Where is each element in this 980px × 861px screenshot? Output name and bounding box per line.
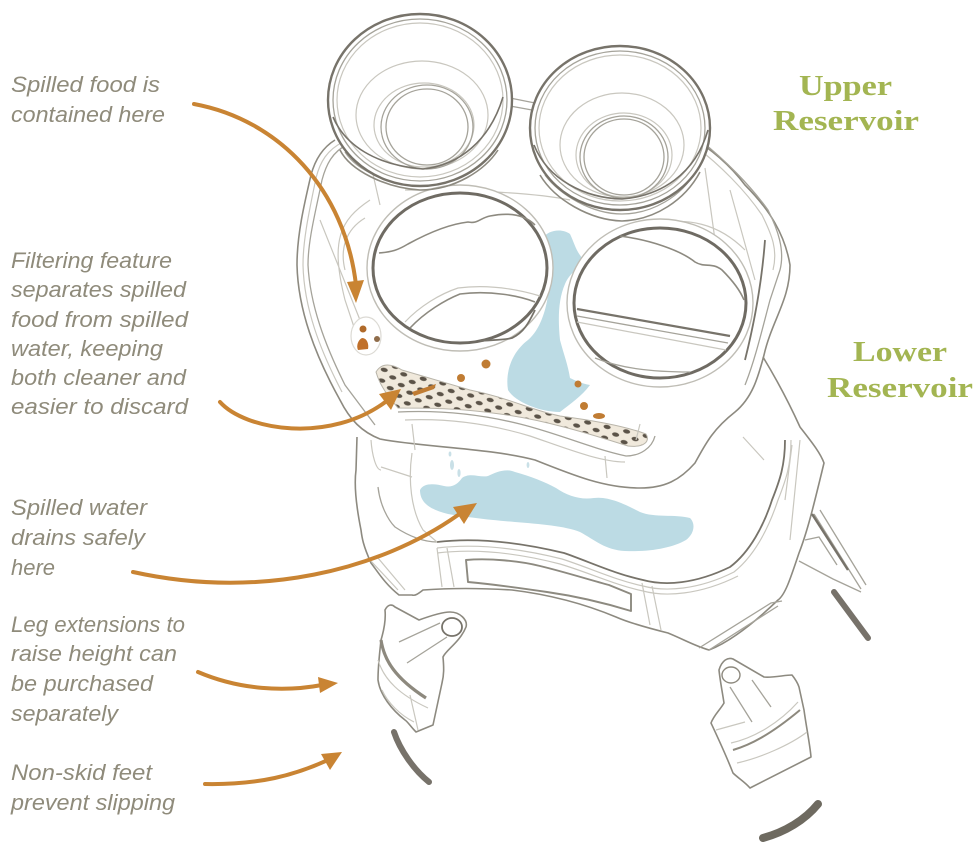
spilled food crumbs (412, 360, 605, 419)
text: leg extensions: separately (11, 701, 120, 726)
right leg extension (711, 658, 811, 788)
heading: upper reservoir (773, 70, 919, 137)
arrow: spilled food (194, 104, 364, 303)
text: filtering feature: Filtering feature (11, 248, 172, 273)
upper reservoir tray (297, 98, 790, 488)
heading: upper reservoir: Reservoir (773, 105, 919, 137)
bowl bridge (510, 98, 535, 110)
text: spilled water: here (11, 555, 55, 580)
text: leg extensions: be purchased (11, 671, 154, 696)
bowl left (328, 14, 512, 190)
text: filtering feature: separates spilled (11, 277, 187, 302)
heading: lower reservoir: Lower (853, 336, 947, 368)
text: spilled food: contained here (11, 102, 165, 127)
text: filtering feature: water, keeping (11, 336, 164, 361)
left ring opening (367, 185, 553, 351)
text: leg extensions (11, 612, 185, 726)
lower reservoir tray (355, 357, 824, 650)
bowl right (530, 46, 710, 221)
text: spilled water: drains safely (11, 525, 147, 550)
right foot pad (763, 804, 818, 838)
left leg extension (378, 605, 466, 732)
left foot pad (394, 732, 429, 782)
text: leg extensions: raise height can (11, 641, 177, 666)
water in upper reservoir (507, 231, 590, 412)
heading: upper reservoir: Upper (799, 70, 892, 102)
right ring opening (567, 219, 753, 387)
text: filtering feature: easier to discard (11, 394, 189, 419)
text: filtering feature: food from spilled (11, 307, 189, 332)
text: spilled food (11, 72, 165, 127)
text: leg extensions: Leg extensions to (11, 612, 185, 637)
food crumb pocket (351, 317, 381, 355)
arrow: filtering feature (220, 389, 401, 429)
text: non-skid feet: prevent slipping (10, 790, 176, 815)
arrow: spilled water (133, 503, 477, 583)
text: spilled water: Spilled water (11, 495, 149, 520)
text: filtering feature (11, 248, 189, 419)
text: spilled food: Spilled food is (11, 72, 160, 97)
text: filtering feature: both cleaner and (11, 365, 187, 390)
text: non-skid feet: Non-skid feet (11, 760, 153, 785)
text: non-skid feet (10, 760, 176, 815)
rear right leg (799, 510, 868, 638)
lower reservoir water (420, 470, 693, 551)
heading: lower reservoir (827, 336, 973, 404)
water drips (449, 452, 529, 477)
lower tray window (466, 559, 631, 611)
text: spilled water (11, 495, 149, 580)
arrow: non-skid feet (205, 752, 342, 784)
heading: lower reservoir: Reservoir (827, 372, 973, 404)
food filter strip (376, 365, 655, 478)
arrow: leg extensions (198, 672, 338, 693)
